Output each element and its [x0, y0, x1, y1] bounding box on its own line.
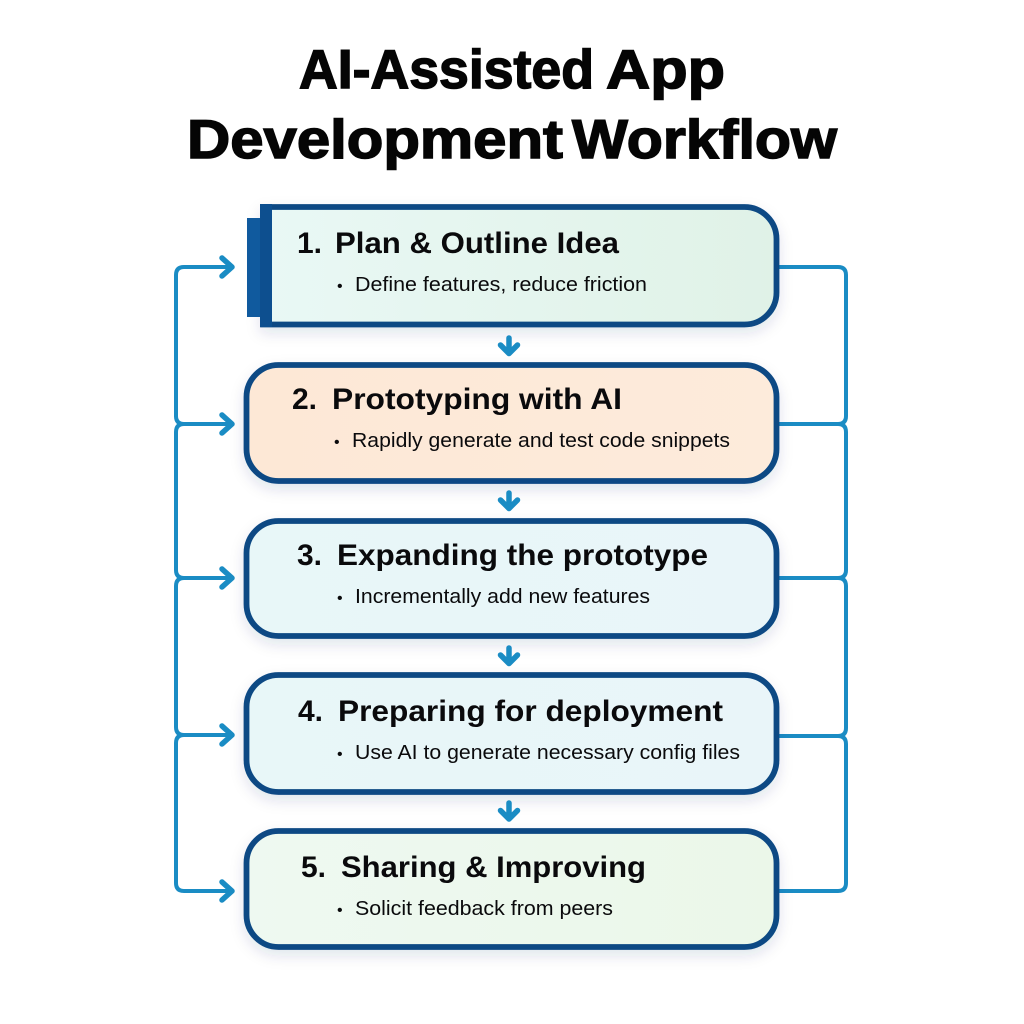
step 4 panel: preparing for deployment: [246, 675, 776, 792]
arrow: step 3 to 4: [500, 648, 518, 664]
step 4 heading: Preparing for deployment: [338, 695, 723, 728]
title: Development: [187, 108, 563, 170]
step 1 side tab: [247, 218, 260, 317]
step 2 panel: prototyping with AI: [246, 365, 776, 481]
step 1 heading: 1.: [297, 227, 322, 260]
step 5 box: [246, 831, 776, 947]
step 1 detail: •: [337, 278, 343, 295]
step 5 heading: 5.: [301, 851, 326, 884]
step 1 detail: Define features, reduce friction: [355, 273, 647, 296]
title: [187, 38, 837, 170]
title: Workflow: [572, 108, 837, 170]
step 5 detail: Solicit feedback from peers: [355, 897, 613, 920]
step 5 panel: sharing and improving: [246, 831, 776, 947]
arrow: step 1 to 2: [500, 338, 518, 354]
step 3 panel: expanding the prototype: [246, 521, 776, 636]
step 2 detail: •: [334, 434, 340, 451]
step 1 left edge: [260, 204, 272, 327]
step 3 detail: Incrementally add new features: [355, 585, 650, 608]
step 4 box: [246, 675, 776, 792]
right feedback connector: [779, 267, 846, 891]
step 1 heading: Plan & Outline Idea: [335, 227, 619, 260]
step 2 heading: Prototyping with AI: [332, 383, 622, 416]
step 3 heading: 3.: [297, 539, 322, 572]
arrow: step 4 to 5: [500, 803, 518, 819]
step 2 detail: Rapidly generate and test code snippets: [352, 429, 730, 452]
step 2 box: [246, 365, 776, 481]
step 3 detail: •: [337, 590, 343, 607]
title: App: [606, 38, 725, 100]
step 3 heading: Expanding the prototype: [337, 539, 708, 572]
step 5 detail: •: [337, 902, 343, 919]
step 1 panel: plan and outline idea: [247, 204, 776, 327]
step 4 detail: •: [337, 746, 343, 763]
step 2 heading: 2.: [292, 383, 317, 416]
step 3 box: [246, 521, 776, 636]
step 5 heading: Sharing & Improving: [341, 851, 646, 884]
title: AI-Assisted: [299, 38, 594, 100]
step 4 detail: Use AI to generate necessary config files: [355, 741, 740, 764]
arrow: step 2 to 3: [500, 493, 518, 508]
step 1 box: [263, 207, 776, 324]
left feedback connector: [176, 258, 232, 900]
step 4 heading: 4.: [298, 695, 323, 728]
